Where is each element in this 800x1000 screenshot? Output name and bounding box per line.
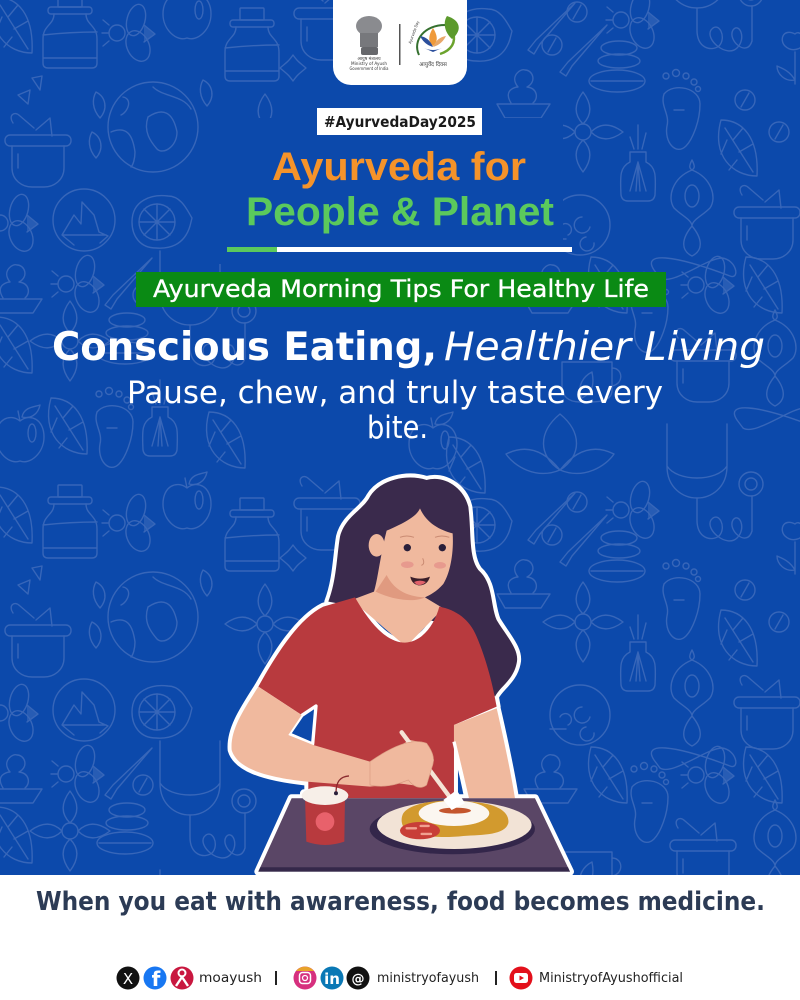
hair [328,477,517,697]
icon: Facebook [144,966,166,991]
icon: LinkedIn: in [324,970,340,988]
illustration outline [232,477,570,872]
tip text: bite. [367,410,428,446]
icon: Threads: @ [352,972,364,987]
face features [400,536,449,585]
blue gap between arm and body [289,706,316,744]
icon: Instagram [294,966,316,990]
fork [402,732,450,797]
bottom white band [0,875,800,1000]
ministry name text: Ministry of Ayush [351,61,387,67]
icon: national emblem [356,16,382,55]
main heading: Conscious Eating, [52,325,437,370]
icon: LinkedIn [320,966,344,990]
title: People & Planet [246,190,554,234]
arm gap highlight [454,742,467,798]
main heading [52,325,765,370]
clear area behind title [218,118,563,264]
table [258,798,570,872]
ministry name text: Government of India [350,66,389,72]
tip text: Pause, chew, and truly taste every [127,375,663,411]
plate of food [370,790,535,854]
neck shadow [376,575,425,600]
cup [302,776,349,845]
icon: Facebook: f [152,967,161,991]
hashtag badge: #AyurvedaDay2025 [324,113,476,131]
logo card [333,0,467,85]
main heading: Healthier Living [444,325,765,370]
icon: Ayurveda Day logo [407,16,459,68]
icon: X: X [123,970,133,988]
ministry name text [350,56,389,72]
ministry name text: आयुष मंत्रालय [357,56,381,62]
separator [495,971,497,985]
icon: YouTube [510,966,532,990]
subtitle banner: Ayurveda Morning Tips For Healthy Life [153,275,649,303]
table edge [258,867,570,872]
social media row [116,966,683,991]
fingers [370,742,433,787]
icon: X [116,966,140,990]
icon: Ayurveda Day logo: Ayurveda Day [407,20,420,44]
icon: Threads [346,966,370,990]
face and neck [352,508,453,647]
left arm [232,687,434,787]
tip text [127,375,663,446]
hashtag badge [317,108,482,135]
title underline [227,247,572,252]
right arm [454,708,515,798]
title [246,145,554,234]
icon: Ayurveda Day logo: आयुर्वेद दिवस [419,61,447,68]
title: Ayurveda for [272,145,526,189]
handle: ministryofayush: ministryofayush [377,971,479,986]
shirt [258,597,497,798]
separator [275,971,277,985]
illustration: woman eating [232,477,570,872]
handle: MinistryofAyushofficial: MinistryofAyushofficial [539,971,683,986]
icon: Koo-style profile [170,966,194,990]
handle: moayush: moayush [199,971,262,986]
logo divider [399,24,400,65]
